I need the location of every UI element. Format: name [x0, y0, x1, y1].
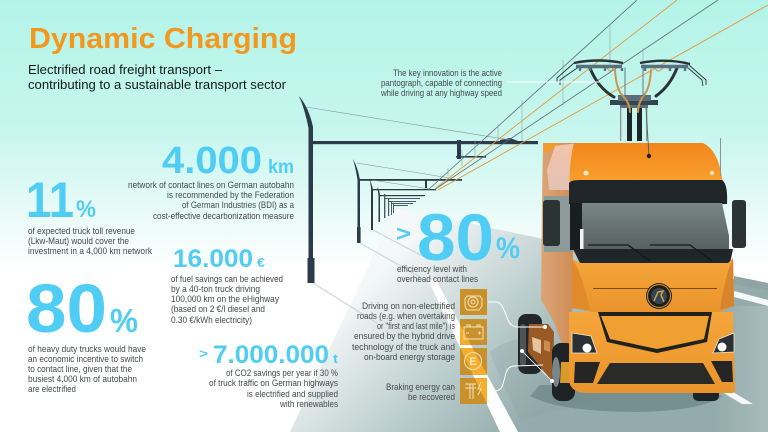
side window — [544, 196, 572, 252]
pantograph note: The key innovation is the active — [393, 68, 502, 78]
road surface — [290, 208, 768, 432]
braking energy note — [386, 382, 455, 402]
stat: 4.000 km: network of contact lines on German autobahn — [128, 180, 294, 190]
pantograph note: pantograph, capable of connecting — [381, 78, 502, 88]
road centre stripe — [428, 280, 518, 432]
windscreen lower band — [573, 249, 733, 263]
fog light right — [711, 361, 733, 382]
stat: 16.000 euro: (based on 2 €/l diesel and — [171, 304, 265, 314]
wipers — [588, 245, 712, 261]
stat: 11 percent: 11 — [26, 172, 74, 228]
hybrid drive note: ensured by the hybrid drive — [354, 331, 455, 341]
stat: 7.000.000 t: t — [333, 351, 339, 366]
stat: 80 percent: are electrified — [28, 384, 76, 394]
windscreen — [582, 203, 732, 250]
callout connector lines — [488, 82, 600, 391]
braking energy note: be recovered — [408, 392, 455, 402]
subtitle: contributing to a sustainable transport sector — [28, 78, 286, 92]
mast 1 — [299, 96, 538, 283]
stat: 7.000.000 t: > — [199, 346, 208, 361]
stat: 7.000.000 t: is electrified and supplied — [247, 389, 338, 399]
icon: electric E: E — [469, 356, 477, 368]
stat: greater than 80 percent: overhead contact lines — [397, 274, 478, 284]
stat: 11 percent: (Lkw-Maut) would cover the — [28, 236, 129, 246]
ground shadow — [530, 385, 722, 412]
upper front panel — [572, 258, 734, 312]
braking energy note: Braking energy can — [386, 382, 455, 392]
stat: 16.000 euro: 100,000 km on the eHighway — [171, 294, 279, 304]
truck — [518, 108, 746, 412]
overhead contact wires — [306, 0, 768, 190]
stat: 11 percent: of expected truck toll revenue — [28, 226, 135, 236]
mirrors — [543, 200, 560, 246]
stat: greater than 80 percent: % — [496, 232, 520, 265]
antennas — [720, 138, 721, 176]
emblem — [646, 283, 672, 309]
callout dots — [520, 325, 554, 383]
hybrid drive note: on-board energy storage — [364, 352, 455, 362]
pantograph note — [380, 68, 502, 98]
stat: 16.000 euro: 0.30 €/kWh electricity) — [171, 315, 252, 325]
stat: 7.000.000 t — [199, 341, 339, 409]
mast 2 — [353, 159, 462, 243]
stat: greater than 80 percent: efficiency level with — [397, 264, 467, 274]
stat: 80 percent: an economic incentive to switch — [28, 354, 143, 364]
stat: 4.000 km — [128, 140, 295, 221]
stat: 80 percent: 80 — [26, 270, 107, 347]
stat: 16.000 euro: by a 40-ton truck driving — [171, 284, 260, 294]
mast 3 — [369, 178, 436, 230]
side fairing panel — [528, 324, 554, 382]
stat: 16.000 euro: € — [257, 255, 265, 270]
hybrid drive note: roads (e.g. when overtaking — [357, 311, 455, 321]
mast shadows — [313, 230, 430, 323]
cab side — [541, 143, 574, 395]
collector heads — [557, 60, 706, 86]
stat: 16.000 euro: of fuel savings can be achieved — [171, 274, 283, 284]
mast 4 — [377, 187, 425, 222]
stat: greater than 80 percent: 80 — [417, 200, 494, 274]
headlight left — [572, 333, 597, 353]
stat: 4.000 km: of German Industries (BDI) as a — [182, 200, 295, 210]
distant masts — [384, 194, 420, 218]
stat: 80 percent: of heavy duty trucks would have — [28, 344, 146, 354]
pantograph arms — [590, 66, 677, 112]
wheel arch flap — [560, 362, 570, 383]
overhead line masts — [299, 96, 538, 283]
stat: 7.000.000 t: of truck traffic on German highways — [209, 378, 338, 388]
pantograph — [557, 60, 706, 141]
hybrid drive note: Driving on non-electrified — [362, 301, 455, 311]
icon: recuperation pole — [460, 378, 487, 404]
lower air intake — [597, 363, 715, 384]
sun visor band — [569, 180, 727, 204]
fog light left — [574, 362, 600, 383]
stat: 80 percent: busiest 4,000 km of autobahn — [28, 374, 137, 384]
lower front bumper — [569, 312, 735, 393]
stat: 4.000 km: 4.000 — [162, 140, 262, 182]
subtitle: Electrified road freight transport – — [28, 63, 222, 77]
stat: 80 percent: % — [110, 302, 138, 339]
headlight right — [713, 333, 734, 353]
icon: battery — [460, 319, 487, 345]
stat: 80 percent: to contact line, given that the — [28, 364, 132, 374]
front wheel — [552, 343, 575, 401]
icon: electric E — [460, 348, 487, 375]
hybrid drive note — [352, 301, 455, 362]
pantograph posts — [627, 108, 642, 141]
stat: 11 percent: investment in a 4,000 km network — [28, 246, 152, 256]
subtitle — [28, 63, 286, 92]
cab roof — [570, 143, 727, 200]
hybrid drive note: technology of the truck and — [352, 342, 455, 352]
stat: 16.000 euro — [171, 245, 283, 325]
stat: greater than 80 percent — [396, 200, 520, 284]
stat: 4.000 km: cost-effective decarbonization measure — [153, 211, 294, 221]
pantograph note: while driving at any highway speed — [380, 88, 502, 98]
stat: 80 percent — [26, 270, 146, 394]
stat: 4.000 km: is recommended by the Federation — [167, 190, 294, 200]
title: Dynamic Charging — [29, 23, 297, 55]
right wheel — [693, 385, 719, 401]
stat: 4.000 km: km — [268, 157, 294, 178]
icon: engine — [460, 289, 487, 315]
stat: 16.000 euro: 16.000 — [173, 245, 253, 273]
stat: 11 percent — [26, 172, 152, 256]
stat: 7.000.000 t: 7.000.000 — [213, 341, 329, 369]
stat: 7.000.000 t: with renewables — [279, 399, 338, 409]
grille chevron — [598, 312, 712, 353]
stat: greater than 80 percent: > — [396, 221, 411, 246]
stat: 7.000.000 t: of CO2 savings per year if 30 % — [226, 368, 338, 378]
rear wheel — [518, 314, 542, 374]
hybrid drive note: or "first and last mile") is — [377, 321, 455, 331]
stat: 11 percent: % — [76, 196, 96, 223]
pantograph base — [610, 100, 658, 105]
